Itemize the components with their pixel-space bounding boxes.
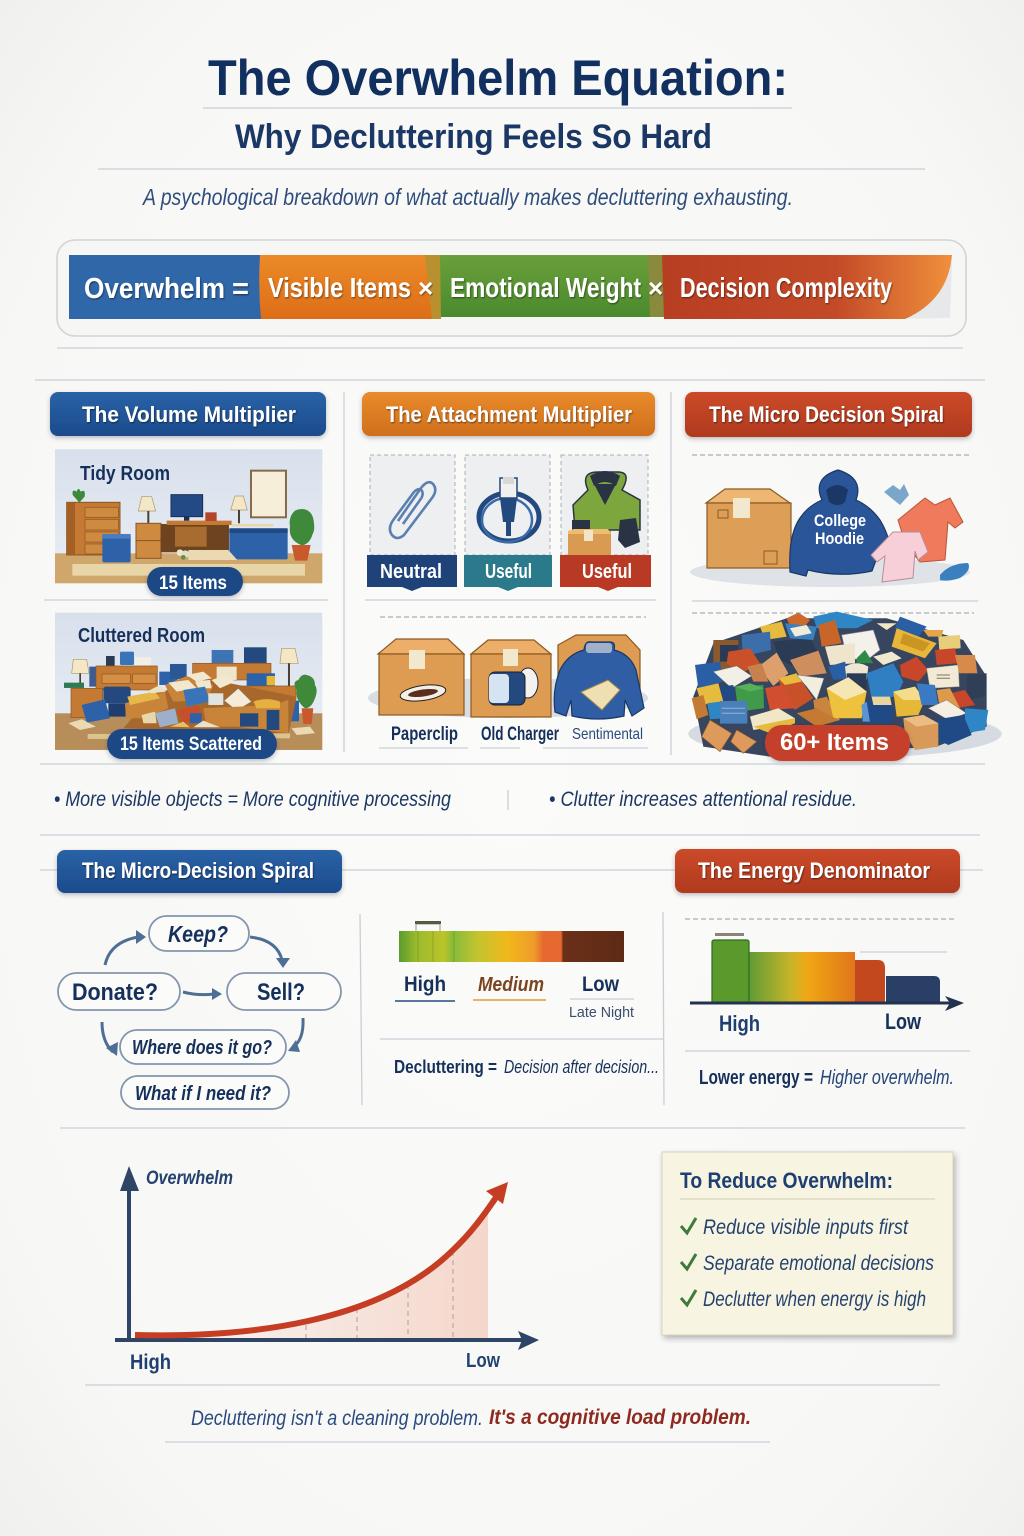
panel: energy battery scale xyxy=(380,921,663,1077)
checklist: Separate emotional decisions xyxy=(703,1252,934,1275)
arrows xyxy=(102,930,303,1056)
checklist: Reduce visible inputs first xyxy=(703,1216,909,1239)
battery labels: Low xyxy=(582,973,620,996)
panel: the micro-decision spiral xyxy=(57,850,342,1109)
axis label: high: High xyxy=(130,1351,171,1374)
closing statement: It's a cognitive load problem. xyxy=(489,1406,751,1429)
illustration: pile of 60+ items xyxy=(688,612,1002,761)
bullet: more visible objects: • More visible objects = More cognitive processing xyxy=(54,788,451,811)
closing statement xyxy=(191,1406,751,1430)
card: useful charger xyxy=(464,455,552,591)
heading: volume multiplier xyxy=(50,392,326,436)
illustration: box with paperclip xyxy=(378,639,464,715)
checklist: Declutter when energy is high xyxy=(703,1288,926,1311)
equation text: = xyxy=(232,273,249,305)
panel: the attachment multiplier xyxy=(362,392,656,748)
labels: item names: Paperclip xyxy=(391,724,458,745)
illustration: tidy room xyxy=(55,449,322,596)
bullet: clutter residue: • Clutter increases attentional residue. xyxy=(549,788,857,811)
checklist xyxy=(681,1216,934,1311)
heading: energy denominator: The Energy Denominator xyxy=(698,858,930,883)
energy labels xyxy=(719,1009,922,1036)
axis label: low: Low xyxy=(466,1350,500,1372)
title: The Overwhelm Equation: xyxy=(208,50,788,106)
heading: micro-decision spiral xyxy=(57,850,342,893)
heading: energy denominator xyxy=(675,849,960,893)
heading: micro decision spiral xyxy=(685,392,972,437)
chart: energy steps xyxy=(690,933,964,1011)
flow: decision pills: Keep? xyxy=(168,921,228,947)
badge: 15 items: 15 Items xyxy=(159,573,227,594)
chart: overwhelm curve xyxy=(115,1166,539,1374)
labels: item names: Sentimental xyxy=(572,726,643,743)
heading: volume multiplier: The Volume Multiplier xyxy=(82,402,296,427)
note: decluttering equals decision after decision: Decluttering = xyxy=(394,1057,497,1077)
axis label: overwhelm: Overwhelm xyxy=(146,1168,233,1189)
callout: to reduce overwhelm: To Reduce Overwhelm: xyxy=(680,1168,893,1193)
card: neutral paperclip xyxy=(367,455,457,591)
label: cluttered room: Cluttered Room xyxy=(78,625,205,647)
badge: 15 items scattered xyxy=(107,729,277,759)
note: lower energy: Lower energy = xyxy=(699,1067,813,1089)
flow: decision pills: Where does it go? xyxy=(132,1037,272,1059)
battery labels: Late Night xyxy=(569,1004,635,1021)
heading: micro-decision spiral: The Micro-Decision Spiral xyxy=(82,858,314,883)
card: useful hoodie xyxy=(560,455,651,591)
panel: equation xyxy=(57,240,966,336)
note: decluttering equals decision after decision xyxy=(394,1057,659,1077)
label: tidy room: Tidy Room xyxy=(80,463,170,485)
badge: 60+ items: 60+ Items xyxy=(780,729,889,756)
equation text: × xyxy=(648,273,663,303)
equation text: Overwhelm xyxy=(84,273,225,305)
subtitle: Why Decluttering Feels So Hard xyxy=(235,118,712,156)
illustration: box with old charger xyxy=(471,640,551,717)
battery labels: High xyxy=(404,973,446,996)
hoodie label xyxy=(814,511,866,548)
illustration: cluttered room xyxy=(55,613,322,759)
card: useful hoodie: Useful xyxy=(582,561,632,583)
panel: the energy denominator xyxy=(675,849,970,1089)
equation text: × xyxy=(418,273,433,303)
closing statement: Decluttering isn't a cleaning problem. xyxy=(191,1407,483,1430)
card: neutral paperclip: Neutral xyxy=(380,561,442,583)
heading: attachment multiplier xyxy=(362,392,655,436)
equation text: Emotional Weight xyxy=(450,272,641,303)
equation text: Visible Items xyxy=(268,272,411,303)
illustration: box, college hoodie and shirts xyxy=(690,470,970,587)
hoodie label: College xyxy=(814,511,866,530)
battery bar xyxy=(399,921,624,962)
hoodie label: Hoodie xyxy=(815,529,864,548)
battery labels xyxy=(395,973,635,1021)
badge: 60+ items xyxy=(765,725,910,761)
equation text xyxy=(84,272,892,305)
energy labels: Low xyxy=(885,1009,922,1034)
equation text: Decision Complexity xyxy=(680,272,892,303)
battery labels: Medium xyxy=(478,974,544,996)
card: useful charger: Useful xyxy=(485,561,532,583)
flow: decision pills: What if I need it? xyxy=(135,1083,271,1105)
panel: the micro decision spiral xyxy=(685,392,1002,761)
panel: the volume multiplier xyxy=(44,392,328,759)
badge: 15 items xyxy=(147,567,243,596)
heading: micro decision spiral: The Micro Decision Spiral xyxy=(709,402,944,427)
labels: item names: Old Charger xyxy=(481,724,559,745)
labels: item names xyxy=(379,724,648,748)
flow: decision pills: Donate? xyxy=(72,979,158,1006)
note: decluttering equals decision after decision: Decision after decision... xyxy=(504,1057,659,1077)
note: lower energy xyxy=(699,1067,954,1089)
tagline: A psychological breakdown of what actually makes decluttering exhausting. xyxy=(141,184,793,210)
note: lower energy: Higher overwhelm. xyxy=(820,1067,954,1089)
flow: decision pills: Sell? xyxy=(257,979,305,1006)
heading: attachment multiplier: The Attachment Multiplier xyxy=(386,402,632,427)
illustration: sentimental hoodie in box xyxy=(554,635,644,719)
energy labels: High xyxy=(719,1011,760,1036)
badge: 15 items scattered: 15 Items Scattered xyxy=(120,734,262,755)
flow: decision pills xyxy=(58,916,341,1109)
callout: to reduce overwhelm xyxy=(662,1152,953,1335)
